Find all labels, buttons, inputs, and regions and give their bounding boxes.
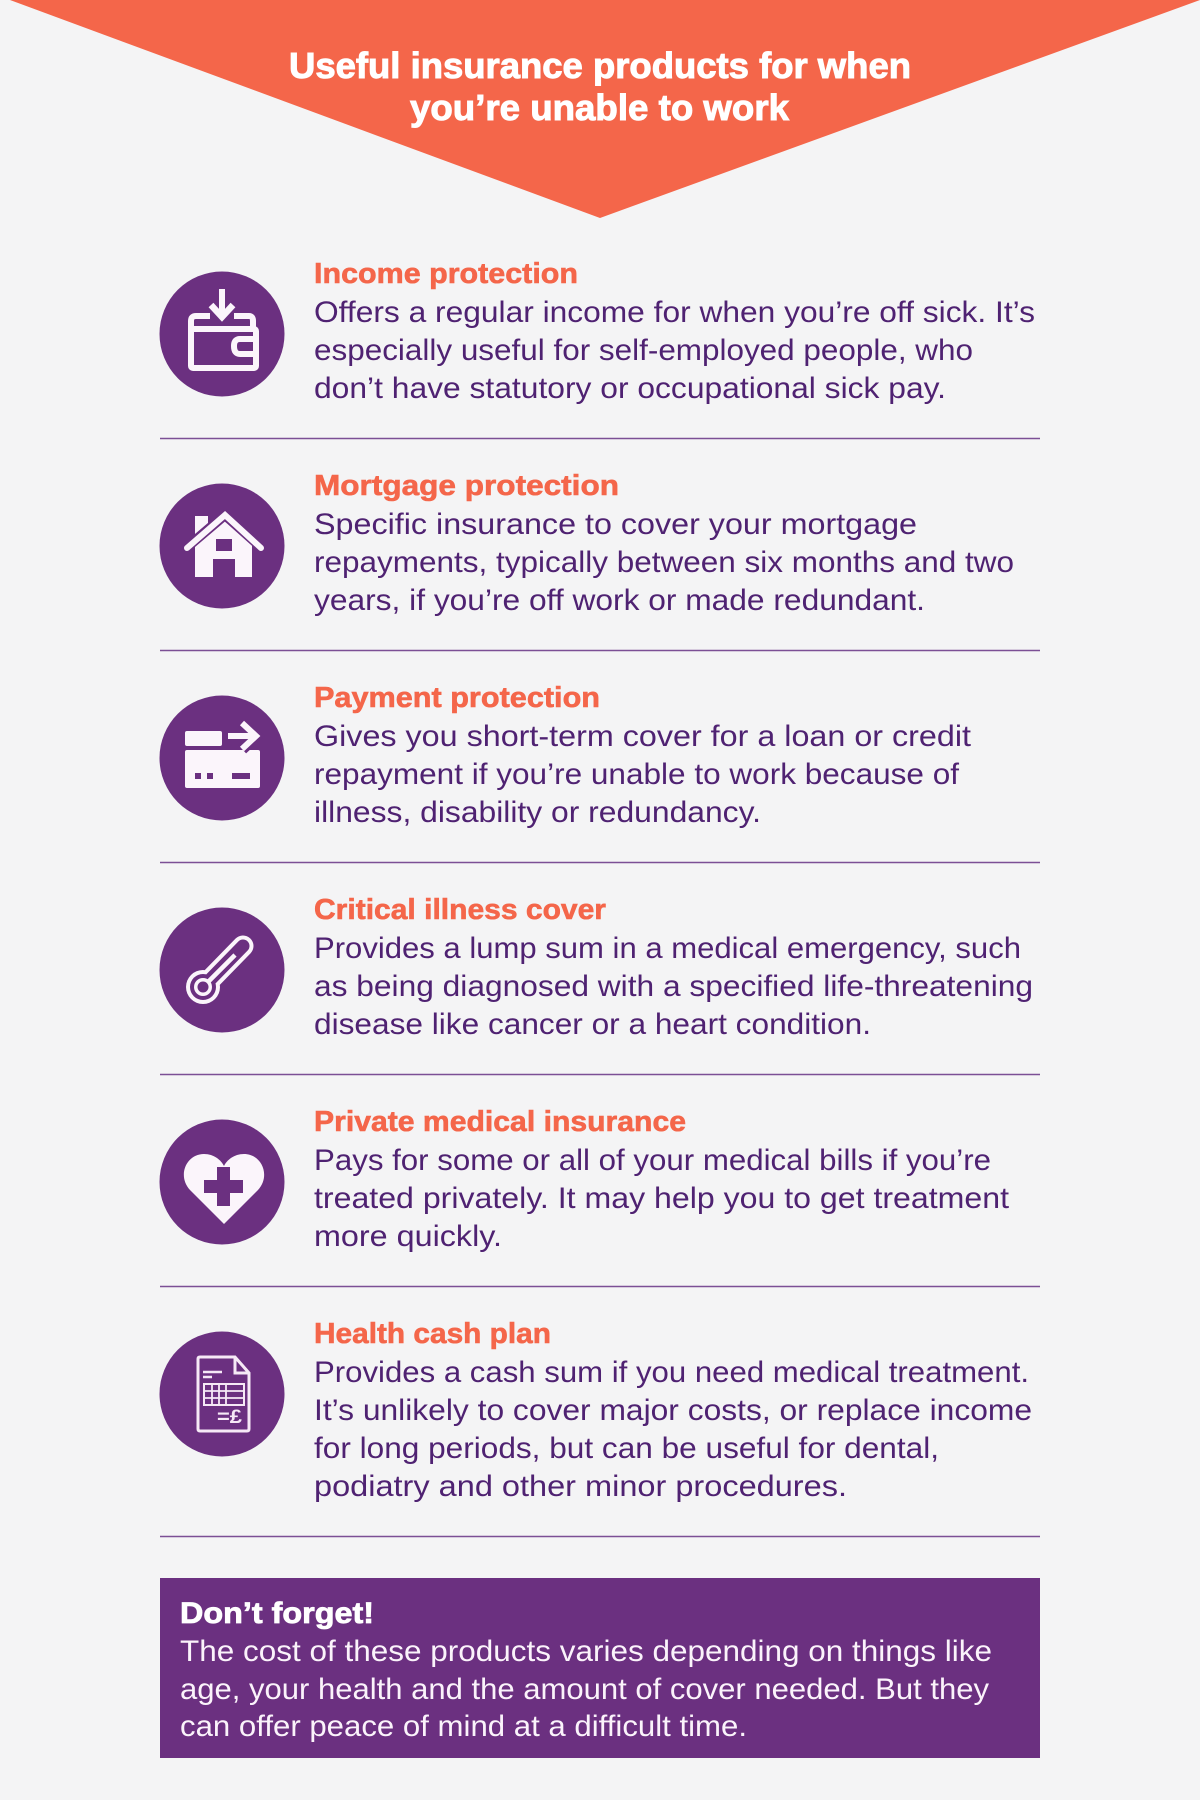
- header banner: [10, 0, 1200, 218]
- panel: income protection: [160, 258, 1035, 405]
- icon: document with table: [160, 1332, 284, 1456]
- callout heading: Don’t forget!: [180, 1597, 374, 1630]
- body text: [314, 508, 1014, 617]
- panel: payment protection: [160, 682, 972, 829]
- body text: It’s unlikely to cover major costs, or replace income: [314, 1394, 1032, 1427]
- body text: as being diagnosed with a specified life-threatening: [314, 970, 1033, 1003]
- body text: treated privately. It may help you to get treatment: [314, 1182, 1010, 1215]
- body text: [314, 1356, 1032, 1503]
- body text: podiatry and other minor procedures.: [314, 1470, 847, 1503]
- body text: Gives you short-term cover for a loan or credit: [314, 720, 972, 753]
- panel: critical illness cover: [160, 894, 1033, 1041]
- title: you’re unable to work: [410, 87, 790, 128]
- icon: wallet with down arrow: [160, 272, 284, 396]
- body text: Offers a regular income for when you’re off sick. It’s: [314, 296, 1035, 329]
- icon: house: [160, 484, 284, 608]
- callout body text: age, your health and the amount of cover needed. But they: [180, 1673, 989, 1706]
- title: Useful insurance products for when: [289, 45, 911, 86]
- heading: Income protection: [314, 258, 578, 290]
- icon: thermometer: [160, 908, 284, 1032]
- body text: illness, disability or redundancy.: [314, 796, 761, 829]
- body text: repayment if you’re unable to work because of: [314, 758, 960, 791]
- body text: Specific insurance to cover your mortgage: [314, 508, 917, 541]
- callout body text: The cost of these products varies depending on things like: [180, 1635, 992, 1668]
- icon: heart with cross: [160, 1120, 284, 1244]
- panel: health cash plan: [160, 1318, 1032, 1503]
- body text: years, if you’re off work or made redundant.: [314, 584, 925, 617]
- callout body text: can offer peace of mind at a difficult time.: [180, 1710, 747, 1743]
- callout body text: [180, 1635, 992, 1743]
- body text: more quickly.: [314, 1220, 502, 1253]
- heading: Critical illness cover: [314, 894, 606, 926]
- heading: Health cash plan: [314, 1318, 551, 1350]
- body text: Pays for some or all of your medical bills if you’re: [314, 1144, 991, 1177]
- body text: especially useful for self-employed people, who: [314, 334, 973, 367]
- panel: private medical insurance: [160, 1106, 1010, 1253]
- body text: disease like cancer or a heart condition.: [314, 1008, 871, 1041]
- body text: for long periods, but can be useful for dental,: [314, 1432, 939, 1465]
- callout: don't forget: [160, 1578, 1040, 1758]
- title: [289, 45, 911, 128]
- body text: Provides a lump sum in a medical emergency, such: [314, 932, 1021, 965]
- body text: Provides a cash sum if you need medical treatment.: [314, 1356, 1029, 1389]
- body text: don’t have statutory or occupational sick pay.: [314, 372, 946, 405]
- icon: credit card with arrow: [160, 696, 284, 820]
- icon: document with table: =£: [217, 1407, 242, 1428]
- body text: [314, 296, 1035, 405]
- panel: mortgage protection: [160, 470, 1014, 617]
- heading: Payment protection: [314, 682, 600, 714]
- body text: [314, 720, 972, 829]
- body text: [314, 932, 1033, 1041]
- heading: Mortgage protection: [314, 470, 619, 502]
- body text: [314, 1144, 1010, 1253]
- body text: repayments, typically between six months and two: [314, 546, 1014, 579]
- heading: Private medical insurance: [314, 1106, 686, 1138]
